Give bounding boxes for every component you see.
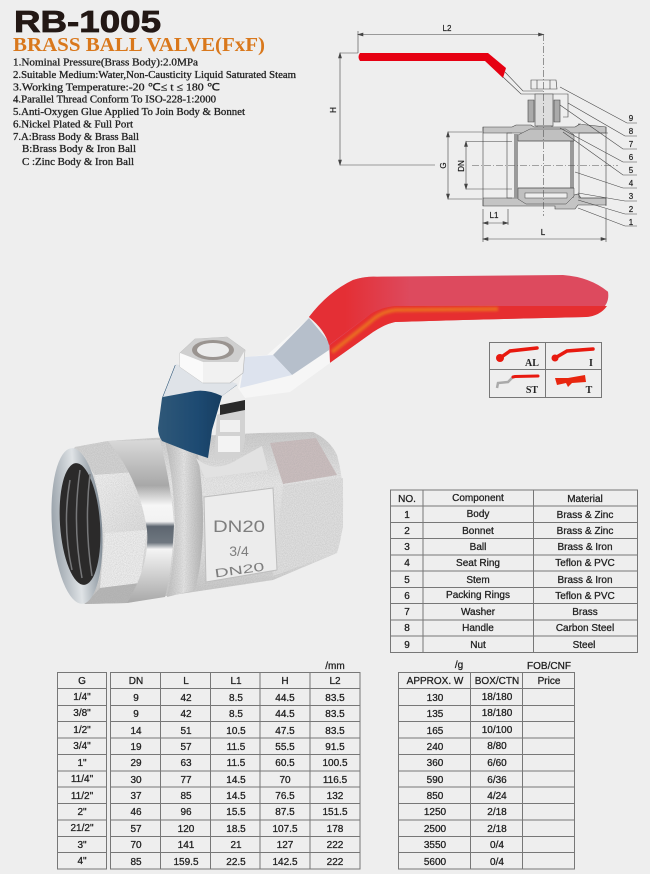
specification list: 1.Nominal Pressure(Brass Body):2.0MPa xyxy=(13,58,198,68)
unit label: mm: /mm xyxy=(325,661,345,672)
weight table rows: 18/180 xyxy=(482,692,513,703)
drawing: handle shank, nut and bracket xyxy=(503,72,568,135)
drawing: part numbers: 6 xyxy=(629,153,634,162)
dimensions header: L xyxy=(183,676,189,687)
parts table rows: Brass & Zinc xyxy=(557,526,613,537)
parts table rows: 9 xyxy=(404,640,410,651)
dimensions rows: 91.5 xyxy=(325,742,345,753)
dimensions rows: 8.5 xyxy=(229,693,243,704)
weight table rows: 4/24 xyxy=(487,791,507,802)
dimensions rows: 42 xyxy=(180,693,192,704)
parts table rows: Washer xyxy=(461,607,496,618)
dimensions rows: 142.5 xyxy=(272,857,298,868)
parts table rows: Stem xyxy=(466,575,490,586)
size column values: 11/2" xyxy=(71,791,94,802)
specification list: 6.Nickel Plated & Full Port xyxy=(13,120,133,130)
parts table rows: Bonnet xyxy=(462,526,494,537)
dimensions rows: 76.5 xyxy=(275,791,295,802)
drawing: part numbers: 9 xyxy=(629,114,634,123)
weight table rows: 8/80 xyxy=(487,741,507,752)
photo: right hex facets xyxy=(270,438,337,484)
specification list: 2.Suitable Medium:Water,Non-Causticity Liquid Saturated Steam xyxy=(13,70,296,81)
dimensions rows: 11.5 xyxy=(227,758,246,769)
drawing: part numbers xyxy=(629,114,634,227)
size column values: G xyxy=(78,676,86,687)
parts table header: Component xyxy=(452,493,504,504)
size column values xyxy=(70,676,94,867)
parts table rows: Brass & Iron xyxy=(557,575,613,586)
parts table rows: Handle xyxy=(462,623,494,634)
size column table xyxy=(58,672,106,869)
drawing: part numbers: 4 xyxy=(629,179,634,188)
dimensions rows: 151.5 xyxy=(322,807,348,818)
drawing: dimension labels: L2 xyxy=(443,24,452,33)
specification list: C :Zinc Body & Iron Ball xyxy=(22,157,134,168)
weight table rows: 130 xyxy=(427,693,444,704)
parts table rows: Teflon & PVC xyxy=(555,591,615,602)
dimensions rows: 30 xyxy=(130,775,142,786)
dimensions rows: 55.5 xyxy=(275,742,295,753)
drawing: dimension labels: L1 xyxy=(490,211,499,220)
drawing: dimension lines xyxy=(338,31,606,242)
drawing: part numbers: 1 xyxy=(629,218,634,227)
dimensions rows: 18.5 xyxy=(226,824,246,835)
specification list: 4.Parallel Thread Conform To ISO-228-1:2000 xyxy=(13,94,216,106)
handle options legend xyxy=(490,342,602,398)
dimensions rows xyxy=(130,693,348,868)
dimensions rows: 83.5 xyxy=(325,693,345,704)
parts table rows: Brass & Zinc xyxy=(557,510,613,521)
size column values: 11/4" xyxy=(71,774,94,785)
dimensions rows: 77 xyxy=(180,775,192,786)
parts table rows: Steel xyxy=(573,640,595,651)
dimensions rows: 44.5 xyxy=(275,709,295,720)
size column grid xyxy=(58,672,106,869)
handle option: I: I xyxy=(589,358,593,369)
drawing: part numbers: 5 xyxy=(629,166,634,175)
parts table rows: 7 xyxy=(404,607,410,618)
size column values: 1/2" xyxy=(73,725,91,736)
size column values: 3/8" xyxy=(73,708,91,719)
dimensions rows: 14 xyxy=(130,726,142,737)
photo: blue chrome bracket xyxy=(158,364,238,458)
parts table header: NO. xyxy=(398,494,416,505)
photo: embossed size panel: DN20 xyxy=(214,560,266,580)
dimensions rows: 222 xyxy=(327,857,344,868)
dimensions header: L1 xyxy=(230,676,242,687)
dimensions rows: 70 xyxy=(130,840,142,851)
dimensions rows: 63 xyxy=(180,758,192,769)
dimensions rows: 22.5 xyxy=(226,857,246,868)
parts table rows: 4 xyxy=(404,558,410,569)
parts table rows: 2 xyxy=(404,526,410,537)
dimensions rows: 132 xyxy=(327,791,344,802)
dimensions grid xyxy=(110,672,360,869)
weight table rows: 18/180 xyxy=(482,708,513,719)
weight table rows: 360 xyxy=(427,758,444,769)
dimensions header xyxy=(129,676,341,687)
dimensions rows: 60.5 xyxy=(275,758,295,769)
size column values: 2" xyxy=(77,807,87,818)
photo: steel lever shank xyxy=(238,318,330,398)
weight table rows: 10/100 xyxy=(482,725,513,736)
weight table header: APPROX. W xyxy=(407,676,464,687)
dimensions rows: 116.5 xyxy=(323,775,348,786)
size column values: 1/4" xyxy=(73,692,91,703)
parts table rows: 3 xyxy=(404,542,410,553)
size column values: 1" xyxy=(77,758,87,769)
parts table rows: 6 xyxy=(404,591,410,602)
parts table rows: Teflon & PVC xyxy=(555,558,615,569)
weight table rows: 1250 xyxy=(424,807,447,818)
parts table rows: 1 xyxy=(404,510,410,521)
dimensions rows: 159.5 xyxy=(173,857,199,868)
dimensions header: H xyxy=(281,676,289,687)
parts table rows: Brass & Iron xyxy=(557,542,613,553)
weight table rows: 850 xyxy=(427,791,444,802)
dimensions rows: 83.5 xyxy=(325,709,345,720)
dimensions rows: 57 xyxy=(130,824,142,835)
dimensions rows: 44.5 xyxy=(275,693,295,704)
drawing: red handle xyxy=(358,53,506,78)
photo: hex nut xyxy=(180,337,245,383)
weight table rows: 3550 xyxy=(424,840,447,851)
unit label: grams: /g xyxy=(455,660,463,671)
dimensions rows: 14.5 xyxy=(226,791,246,802)
size column values: 3/4" xyxy=(73,741,91,752)
dimensions rows: 8.5 xyxy=(229,709,243,720)
legend grid xyxy=(490,342,602,398)
photo: embossed size panel xyxy=(204,488,277,582)
drawing: dimension labels: DN xyxy=(457,160,466,172)
photo: chrome collar xyxy=(108,440,174,603)
drawing: dimension labels: L xyxy=(541,228,546,237)
dimensions rows: 127 xyxy=(277,840,294,851)
specification list: 3.Working Temperature:-20 ℃≤ t ≤ 180 ℃ xyxy=(13,82,220,94)
weight table header: BOX/CTN xyxy=(475,676,519,687)
parts table rows: Nut xyxy=(470,640,486,651)
parts table rows: Body xyxy=(467,509,489,520)
dimensions rows: 9 xyxy=(133,709,139,720)
drawing: numbered leader lines xyxy=(560,87,637,226)
photo: embossed size panel: 3/4 xyxy=(229,543,249,559)
dimensions rows: 15.5 xyxy=(226,807,246,818)
drawing: part numbers: 7 xyxy=(629,140,634,149)
weight table rows: 0/4 xyxy=(490,840,504,851)
dimensions rows: 10.5 xyxy=(226,726,246,737)
dimensions rows: 70 xyxy=(279,775,291,786)
dimensions rows: 37 xyxy=(130,791,142,802)
weight table rows: 6/36 xyxy=(487,775,507,786)
parts table xyxy=(390,490,638,652)
photo: stem and boss xyxy=(196,400,268,478)
dimensions rows: 19 xyxy=(130,742,142,753)
drawing: part numbers: 8 xyxy=(629,127,634,136)
size column values: 3" xyxy=(77,840,87,851)
dimensions rows: 87.5 xyxy=(275,807,295,818)
weight table rows: 240 xyxy=(427,742,444,753)
dimensions rows: 29 xyxy=(130,758,142,769)
weight table rows: 0/4 xyxy=(490,857,504,868)
size column values: 4" xyxy=(77,856,87,867)
subtitle: product name: BRASS BALL VALVE(FxF) xyxy=(13,34,265,56)
weight table rows: 2/18 xyxy=(487,807,507,818)
dimensions header: DN xyxy=(129,676,143,687)
weight table rows: 165 xyxy=(427,726,444,737)
weight table rows: 2500 xyxy=(424,824,447,835)
dimensions rows: 11.5 xyxy=(227,742,246,753)
drawing: dimension labels: H xyxy=(329,107,338,113)
dimensions rows: 57 xyxy=(180,742,192,753)
parts table rows: Brass xyxy=(572,607,598,618)
photo: centre body band xyxy=(165,438,203,597)
parts table header xyxy=(398,493,603,505)
dimensions rows: 222 xyxy=(327,840,344,851)
photo: embossed size panel: DN20 xyxy=(213,517,265,536)
parts table header: Material xyxy=(567,494,603,505)
drawing: dimension labels: G xyxy=(439,162,448,169)
handle option: AL: AL xyxy=(525,358,539,369)
dimensions rows: 85 xyxy=(180,791,192,802)
parts table rows: Carbon Steel xyxy=(556,623,614,634)
parts table rows: 8 xyxy=(404,623,410,634)
handle option: ST: ST xyxy=(526,385,538,396)
weight table header xyxy=(407,676,561,687)
parts table rows: Ball xyxy=(470,542,486,553)
size column values: 21/2" xyxy=(70,823,94,834)
drawing: valve body section xyxy=(483,124,608,209)
weight table rows: 135 xyxy=(427,709,444,720)
weight table rows xyxy=(424,692,513,868)
specification list: 5.Anti-Oxygen Glue Applied To Join Body & Bonnet xyxy=(13,107,245,118)
dimensions header: L2 xyxy=(329,676,341,687)
dimensions rows: 47.5 xyxy=(275,726,295,737)
dimensions rows: 42 xyxy=(180,709,192,720)
weight and packing table xyxy=(398,672,574,869)
dimensions rows: 9 xyxy=(133,693,139,704)
dimensions rows: 107.5 xyxy=(272,824,298,835)
drawing: centre lines xyxy=(472,34,618,216)
specification list: 7.A:Brass Body & Brass Ball xyxy=(13,132,139,143)
title: model number: RB-1005 xyxy=(14,4,161,39)
dimensions rows: 100.5 xyxy=(322,758,348,769)
specification list: B:Brass Body & Iron Ball xyxy=(22,144,136,155)
photo: threaded opening xyxy=(47,446,107,606)
dimensions rows: 141 xyxy=(178,840,195,851)
parts table rows: 5 xyxy=(404,575,410,586)
drawing: dimension labels xyxy=(329,24,546,237)
drawing: part numbers: 3 xyxy=(629,192,634,201)
dimensions rows: 96 xyxy=(180,807,192,818)
photo: red vinyl handle grip xyxy=(309,275,608,363)
weight table rows: 2/18 xyxy=(487,824,507,835)
parts table grid xyxy=(390,490,638,652)
dimensions rows: 51 xyxy=(180,726,192,737)
weight table rows: 5600 xyxy=(424,857,447,868)
dimensions rows: 14.5 xyxy=(226,775,246,786)
drawing: part numbers: 2 xyxy=(629,205,634,214)
dimensions rows: 120 xyxy=(178,824,195,835)
weight table rows: 590 xyxy=(427,775,444,786)
photo: valve body xyxy=(52,432,343,604)
weight table grid xyxy=(398,672,574,869)
dimensions rows: 83.5 xyxy=(325,726,345,737)
product photo: ball valve illustration xyxy=(47,275,608,606)
dimensions rows: 21 xyxy=(230,840,242,851)
technical drawing: valve cross-section with dimensions xyxy=(329,24,637,242)
label: FOB/CNF: FOB/CNF xyxy=(527,661,571,672)
photo: left hex nut facets xyxy=(75,441,137,475)
parts table rows: Packing Rings xyxy=(446,590,510,601)
dimensions rows: 46 xyxy=(130,807,142,818)
handle option: T: T xyxy=(586,385,593,396)
parts table rows xyxy=(404,509,615,651)
weight table header: Price xyxy=(538,676,561,687)
dimensions table xyxy=(110,672,360,869)
weight table rows: 6/60 xyxy=(487,758,507,769)
parts table rows: Seat Ring xyxy=(456,558,500,569)
specification list xyxy=(13,58,296,168)
dimensions rows: 85 xyxy=(130,857,142,868)
dimensions rows: 178 xyxy=(327,824,344,835)
